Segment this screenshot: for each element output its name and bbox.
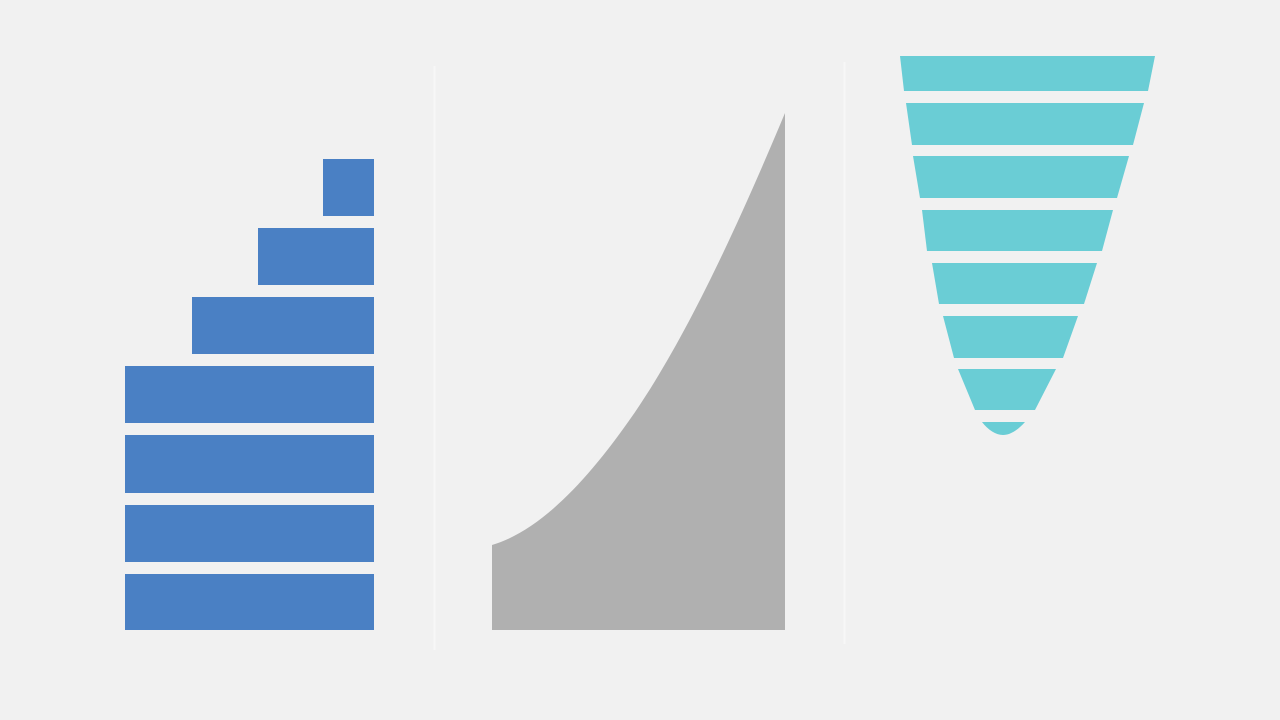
panel: teal funnel: [900, 56, 1155, 435]
bar: step 1 (top): [323, 159, 374, 216]
bar: step 2: [258, 228, 374, 285]
bar: step 3: [192, 297, 374, 354]
panel: stepped blue bars: [125, 159, 374, 630]
funnel band 7: [958, 369, 1056, 410]
funnel band 1: [900, 56, 1155, 91]
bar: step 5: [125, 435, 374, 493]
funnel band 8 (tip): [982, 422, 1025, 435]
bar: step 7 (bottom): [125, 574, 374, 630]
funnel band 5: [932, 263, 1097, 304]
funnel band 2: [906, 103, 1144, 145]
funnel band 4: [922, 210, 1113, 251]
funnel band 6: [943, 316, 1078, 358]
bar: step 6: [125, 505, 374, 562]
bar: step 4: [125, 366, 374, 423]
funnel band 3: [913, 156, 1129, 198]
panel: grey growth curve area: [492, 113, 785, 630]
